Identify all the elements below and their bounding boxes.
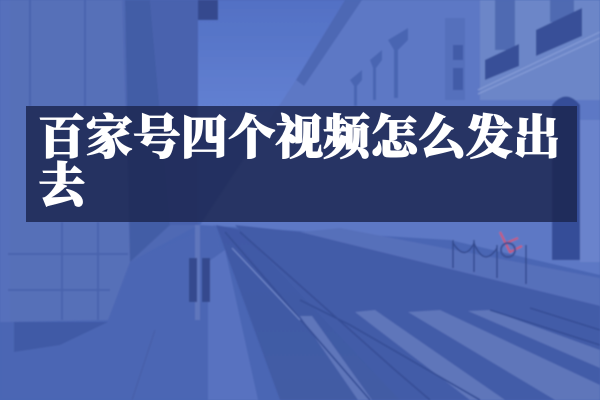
stanchions and chain <box>453 240 526 284</box>
left sidewalk <box>0 225 255 400</box>
road <box>216 225 600 400</box>
street lamp <box>198 0 218 20</box>
sign post <box>189 225 210 320</box>
left building <box>0 0 218 400</box>
crossing stripes <box>300 310 600 400</box>
bicycle <box>500 232 522 257</box>
title banner <box>26 106 577 222</box>
tram rails <box>225 232 600 400</box>
sky <box>185 0 355 130</box>
balconies <box>485 44 519 80</box>
right building <box>200 0 600 275</box>
title: 百家号四个视频怎么发出去 <box>38 113 560 213</box>
